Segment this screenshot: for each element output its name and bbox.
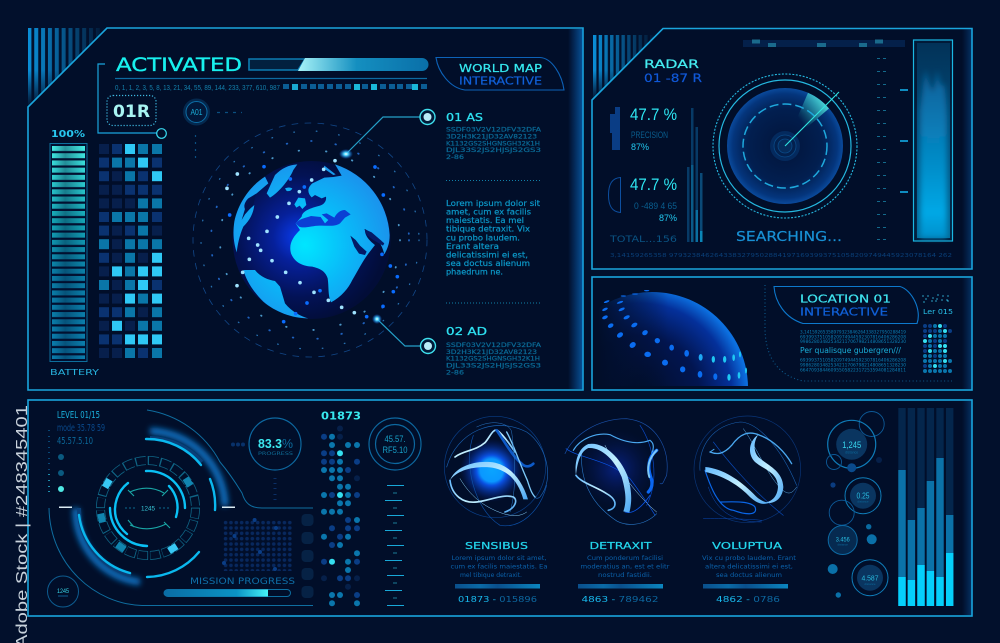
- bubble cluster: 3.456: [836, 536, 850, 544]
- stripes: top-left corner: [28, 28, 107, 107]
- callout: 01 AS: 2-86: [446, 155, 464, 161]
- ring: 45.57: [369, 418, 421, 470]
- bar chart: [898, 408, 953, 606]
- radar scope: [713, 74, 857, 218]
- caption: sensibus: SENSIBUS: [465, 541, 528, 552]
- body text: tibique detraxit. Vix: [446, 225, 530, 234]
- stripes: radar corner: [593, 35, 655, 100]
- bubble cluster: distance: [837, 542, 848, 546]
- stat: second value: TOTAL...156: [609, 235, 677, 245]
- vertical gauge: [914, 40, 952, 241]
- caption: voluptua: VOLUPTUA: [712, 541, 783, 552]
- tab: location interactive: LOCATION 01: [800, 294, 891, 306]
- caption: voluptua: altera delicatissimi ei est,: [705, 562, 793, 570]
- caption: voluptua: 4862 - 0786: [716, 595, 780, 604]
- panel: mission dashboard: [28, 400, 972, 616]
- mission progress bar: [164, 577, 295, 596]
- callout: 01 AS: [339, 110, 541, 161]
- stat: precision: PRECISION: [631, 130, 668, 140]
- location text block: 69399375105820974944592307816406286208: [800, 334, 906, 340]
- badge: A01: A01: [190, 108, 203, 117]
- callout: 02 AD: [372, 314, 541, 376]
- heading: radar: 01 -87 R: [644, 71, 702, 85]
- location text block: 99862803482534211706798214808651328230: [800, 339, 906, 344]
- stat: second value: [608, 175, 678, 245]
- callout: 02 AD: 3D2H3K21JD32AV82123: [446, 350, 537, 356]
- callout: 01 AS: SSDF03V2V12DFV32DFA: [446, 128, 541, 134]
- panel: radar: [592, 28, 972, 269]
- tab: world map interactive: [436, 58, 564, 90]
- heading: activated: [98, 54, 429, 138]
- caption: detraxit: DETRAXIT: [590, 541, 652, 552]
- progress ring: %: [282, 437, 293, 451]
- caption: sensibus: mel tibique detraxit.: [460, 571, 522, 579]
- location side stats: Ler 015: [923, 308, 953, 316]
- bars: radar vertical: [687, 108, 702, 242]
- body text: cu probo laudem.: [446, 233, 520, 242]
- land: south america: [243, 270, 308, 318]
- digit strip: 3,14159265358 97932384626433832795028841971693993751058209749445923078164 262: [610, 253, 952, 259]
- stat: precision: [610, 105, 677, 153]
- panel: world map: [28, 28, 583, 390]
- tab: location interactive: INTERACTIVE: [800, 306, 888, 318]
- body text: phaedrum ne.: [446, 268, 503, 277]
- badge: A01: [183, 98, 242, 162]
- progress ring: 83.3: [258, 437, 282, 451]
- label: searching: SEARCHING...: [736, 229, 842, 245]
- bubble cluster: distance: [864, 582, 876, 586]
- body text: amet, cum ex facilis: [446, 208, 531, 217]
- dot matrix: mission: [222, 518, 293, 571]
- panel: location: [591, 276, 973, 391]
- callout: 01 AS: DJL33S2JS2HJSJS2GS3: [446, 148, 541, 154]
- square data grid: [99, 144, 162, 358]
- location text block: Per qualisque gubergren///: [800, 346, 901, 355]
- tab: location interactive: [774, 286, 918, 324]
- callout: 01 AS: K1132GS2SHGNSGH32K1H: [446, 141, 540, 147]
- stat: second value: 0 -489 4 65: [634, 201, 677, 211]
- land: eurasia and africa: [290, 164, 390, 302]
- body text: [446, 180, 541, 303]
- tick ladder: [385, 486, 404, 606]
- globe: [225, 159, 399, 323]
- dot column chart: 01873: [321, 410, 361, 606]
- bubble cluster: 0.25: [856, 492, 870, 500]
- panel frame: [28, 400, 972, 616]
- mission progress bar: MISSION PROGRESS: [190, 577, 295, 587]
- callout: 01 AS: 3D2H3K21JD32AV82123: [446, 134, 537, 140]
- battery meter: [50, 129, 99, 377]
- panel frame: [28, 28, 583, 390]
- stat: precision: 47.7 %: [630, 105, 677, 124]
- heading: radar: [644, 57, 702, 85]
- callout: 02 AD: DJL33S2JS2HJSJS2GS3: [446, 363, 541, 369]
- panel frame: [592, 277, 972, 390]
- bubble cluster: distance: [857, 500, 869, 504]
- dotted guide: [765, 285, 952, 381]
- location side stats: [922, 295, 953, 373]
- caption: detraxit: moderatius an, est et elitr: [580, 562, 670, 570]
- ring: 45.57: RF5.10: [382, 445, 408, 455]
- tab: world map interactive: WORLD MAP: [459, 63, 542, 75]
- sea: mediterranean: [296, 210, 351, 227]
- body text: Erant altera: [446, 242, 499, 251]
- caption: voluptua: [702, 541, 796, 604]
- battery meter: BATTERY: [50, 368, 99, 377]
- level readout: [49, 410, 105, 492]
- body text: Lorem ipsum dolor sit: [446, 199, 540, 208]
- location text block: 66470938446095505822317253594081284811: [800, 368, 906, 372]
- dotted orbit rings: [193, 123, 427, 357]
- tick column: [877, 58, 908, 240]
- level readout: 45.57.5.10: [57, 436, 93, 447]
- status squares row: [283, 84, 427, 90]
- body text: sea doctus alienum: [446, 259, 530, 268]
- blue markers on globe: [228, 165, 399, 323]
- caption: sensibus: 01873 - 015896: [458, 595, 537, 604]
- big rounded blocks: [302, 514, 314, 598]
- ring: 45.57: 45.57.: [384, 434, 406, 444]
- heading: radar: RADAR: [644, 57, 699, 71]
- caption: voluptua: sea doctus alienum: [716, 571, 782, 579]
- bubble cluster: 1,245: [842, 440, 861, 451]
- heading: activated: ACTIVATED: [116, 54, 242, 76]
- caption: detraxit: Cum ponderum facilisi: [587, 554, 663, 562]
- body text: delicatissimi ei est,: [446, 250, 528, 260]
- sphere: voluptua: [694, 416, 801, 523]
- caption: sensibus: cum ex facilis maiestatis. Ea: [450, 562, 548, 570]
- bubble cluster: distance: [845, 450, 858, 454]
- dome dots: [602, 290, 747, 381]
- location text block: 3,14159265358979323846264338327950288419: [800, 330, 906, 334]
- caption: detraxit: nostrud fastidii.: [598, 571, 652, 579]
- small gauge: 1245: [48, 576, 78, 607]
- caption: detraxit: [578, 541, 670, 604]
- sphere: sensibus: [444, 416, 548, 526]
- land: scandinavia strips: [324, 166, 336, 175]
- location text block: 69399375105820974944592307816406286208: [800, 358, 906, 362]
- location text block: [800, 330, 906, 372]
- caption: sensibus: [450, 541, 548, 604]
- stat: second value: 47.7 %: [630, 175, 677, 194]
- callout: 01 AS: 01 AS: [446, 112, 483, 124]
- body text: maiestatis. Ea mel: [446, 216, 524, 225]
- bubble cluster: 4.587: [862, 574, 878, 582]
- caption: detraxit: 4863 - 789462: [582, 595, 659, 604]
- hud gauge: [49, 410, 313, 606]
- level readout: LEVEL 01/15: [57, 410, 100, 421]
- badge: 01R: [107, 96, 156, 126]
- stat: second value: 87%: [659, 213, 678, 224]
- level readout: mode 35.78 59: [57, 423, 105, 434]
- dome: [602, 292, 748, 386]
- badge: 01R: 01R: [113, 102, 150, 122]
- tab: world map interactive: INTERACTIVE: [459, 76, 542, 88]
- radar top blocks: [743, 40, 905, 47]
- progress ring: PROGRESS: [258, 451, 293, 457]
- callout: 02 AD: 02 AD: [446, 326, 487, 338]
- caption: voluptua: Vix cu probo laudem. Erant: [702, 554, 796, 562]
- sea: red sea and gulf: [350, 229, 384, 255]
- caption: sensibus: Lorem ipsum dolor sit amet,: [452, 554, 546, 562]
- location text block: 99862803482534211706798214808651328230: [800, 362, 906, 368]
- land: north america: [234, 177, 268, 252]
- progress ring: [231, 418, 301, 500]
- callout: 02 AD: SSDF03V2V12DFV32DFA: [446, 343, 541, 349]
- callout: 02 AD: 2-86: [446, 370, 464, 376]
- land: islands: [285, 187, 306, 209]
- stock credit: Adobe Stock | #248345401: [14, 405, 31, 643]
- sphere: detraxit: [565, 419, 667, 524]
- heading: activated: 0, 1, 1, 2, 3, 5, 8, 13, 21, 34, 55, 89, 144, 233, 377, 610, 987: [115, 85, 280, 92]
- callout: 02 AD: K1132GS2SHGNSGH32K1H: [446, 357, 540, 363]
- land: greenland: [267, 164, 297, 198]
- stat: precision: 87%: [631, 142, 650, 153]
- bubble cluster: [826, 412, 888, 598]
- battery meter: 100%: [51, 129, 86, 140]
- light markers on globe: [225, 159, 356, 314]
- panel frame: [592, 28, 972, 269]
- dot column chart: 01873: 01873: [321, 410, 361, 422]
- small gauge: 1245: 1245: [57, 588, 69, 595]
- hud gauge: 1245: [141, 506, 155, 512]
